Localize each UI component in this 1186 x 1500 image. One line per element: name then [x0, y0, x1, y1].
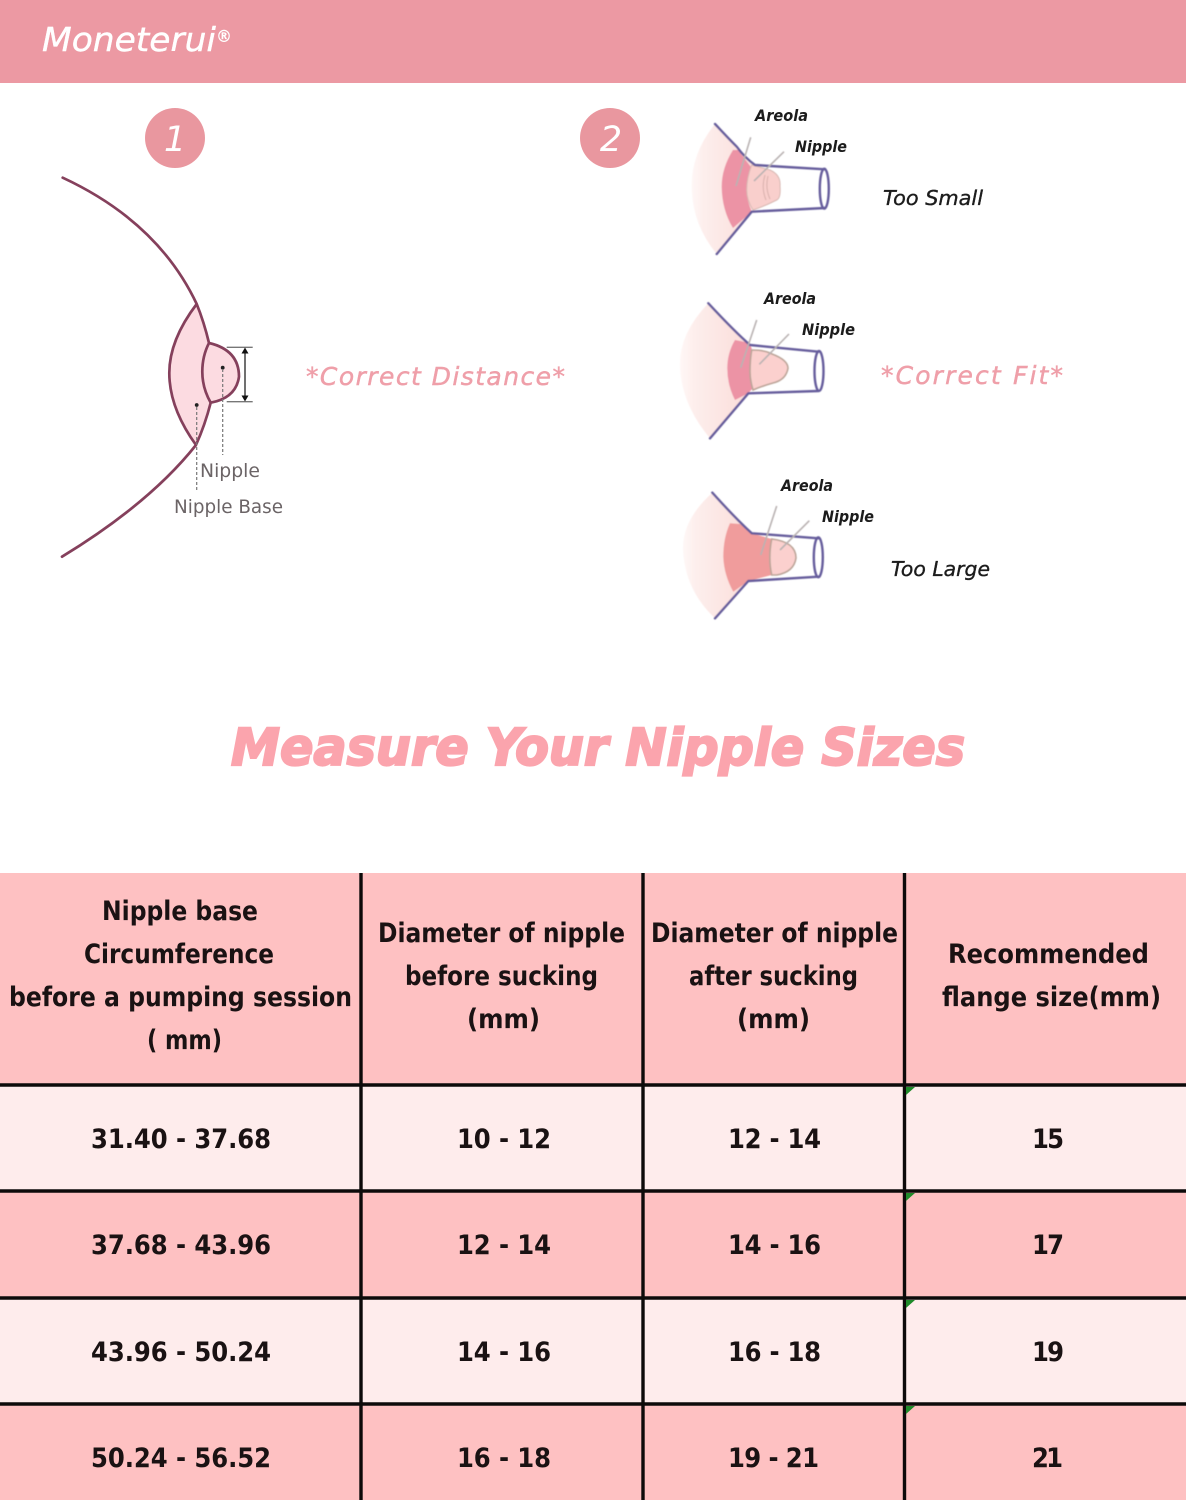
step 1 badge: 1: [164, 120, 186, 160]
table row 2: 37.68 - 43.96: [91, 1230, 271, 1261]
column header: diameter after sucking: after sucking: [689, 961, 858, 992]
diagram: flange correct fit: Areola: [762, 289, 816, 308]
column header: nipple base circumference: [9, 896, 352, 1056]
table row 2: [91, 1230, 1064, 1261]
table row 3: 19: [1032, 1337, 1064, 1368]
step 1 badge: [145, 108, 205, 168]
diagram: flange too large: Areola: [779, 476, 833, 495]
column header: diameter before sucking: Diameter of nipple: [378, 918, 625, 949]
header band with brand: [0, 0, 1186, 83]
column header: diameter after sucking: [651, 918, 898, 1035]
column header: recommended flange size: Recommended: [948, 939, 1149, 970]
table row 1: [91, 1124, 1064, 1155]
diagram: flange too large: [683, 476, 990, 618]
column header: diameter after sucking: (mm): [737, 1004, 810, 1035]
diagram: flange too small: [692, 106, 983, 254]
column header: nipple base circumference: Circumference: [84, 939, 274, 970]
table row 4: 21: [1032, 1443, 1063, 1474]
table row 4: [91, 1443, 1063, 1474]
header band with brand: Moneterui: [42, 20, 216, 59]
column header: recommended flange size: [942, 939, 1161, 1013]
diagram: flange too large: Nipple: [822, 507, 874, 526]
title: Measure Your Nipple Sizes: [231, 719, 965, 778]
table row 1: 31.40 - 37.68: [91, 1124, 271, 1155]
table row 3: 14 - 16: [457, 1337, 551, 1368]
table row 2: 17: [1032, 1230, 1064, 1261]
column header: diameter before sucking: (mm): [467, 1004, 540, 1035]
column header: diameter before sucking: before sucking: [405, 961, 598, 992]
diagram: flange too small: Areola: [753, 106, 808, 125]
table row 4: 16 - 18: [457, 1443, 551, 1474]
table row 3: [91, 1337, 1064, 1368]
table row 1: 15: [1032, 1124, 1064, 1155]
table row 2: 12 - 14: [457, 1230, 551, 1261]
column header: nipple base circumference: Nipple base: [102, 896, 258, 927]
sizing table: [0, 873, 1186, 1500]
step 2 badge: [580, 108, 640, 168]
table row 3: 43.96 - 50.24: [91, 1337, 271, 1368]
diagram: flange correct fit: [680, 289, 855, 438]
table row 2: 14 - 16: [728, 1230, 821, 1261]
table row 4: 19 - 21: [728, 1443, 819, 1474]
diagram: flange too large: Too Large: [891, 557, 990, 581]
column header: diameter before sucking: [378, 918, 625, 1035]
column header: recommended flange size: flange size(mm): [942, 982, 1161, 1013]
caption: correct distance: *Correct Distance*: [306, 362, 565, 391]
step 2 badge: 2: [600, 120, 622, 160]
diagram: breast side profile with nipple measurement: [62, 178, 283, 557]
diagram: flange correct fit: Nipple: [802, 320, 855, 339]
diagram: breast side profile with nipple measurement: Nipple: [200, 460, 260, 482]
column header: diameter after sucking: Diameter of nipple: [651, 918, 898, 949]
column header: nipple base circumference: ( mm): [147, 1025, 222, 1056]
table row 1: 12 - 14: [728, 1124, 821, 1155]
diagram: flange too small: Nipple: [795, 137, 847, 156]
header band with brand: ®: [216, 27, 232, 47]
column header: nipple base circumference: before a pumping session: [9, 982, 352, 1013]
table row 1: 10 - 12: [457, 1124, 551, 1155]
diagram: breast side profile with nipple measurement: Nipple Base: [174, 496, 283, 518]
diagram: flange too small: Too Small: [883, 186, 983, 210]
table row 3: 16 - 18: [728, 1337, 821, 1368]
table row 4: 50.24 - 56.52: [91, 1443, 271, 1474]
caption: correct fit: *Correct Fit*: [881, 361, 1063, 390]
